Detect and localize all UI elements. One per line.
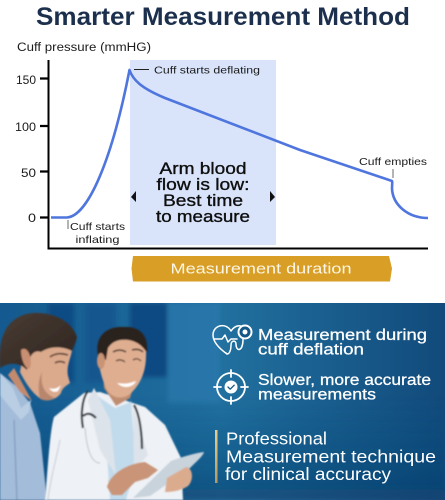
y-axis labels: 0 <box>28 211 36 225</box>
callout: cuff starts inflating: inflating <box>76 234 120 246</box>
y-axis title: Cuff pressure (mmHG) <box>17 42 151 54</box>
measurement duration bar: Measurement duration <box>170 262 352 278</box>
band label <box>156 160 250 226</box>
callout: cuff starts deflating: Cuff starts deflating <box>154 64 260 76</box>
callout: cuff starts inflating <box>68 220 125 246</box>
band label: to measure <box>156 208 250 226</box>
measurement duration bar <box>132 256 392 282</box>
band label: Best time <box>163 192 243 210</box>
icon: target with check <box>214 370 248 404</box>
callout: cuff empties <box>359 156 427 178</box>
low blood flow band <box>130 60 276 245</box>
chart: cuff pressure over time <box>15 42 428 248</box>
gold divider <box>215 430 218 483</box>
y-axis labels: 150 <box>16 73 36 87</box>
photo: doctor <box>45 327 183 500</box>
callout: cuff starts inflating: Cuff starts <box>70 221 125 233</box>
text: professional technique <box>225 428 436 484</box>
text: slower, more accurate measurements <box>258 373 430 400</box>
text: measurement during cuff deflation: cuff deflation <box>258 342 364 358</box>
text: slower, more accurate measurements: measurements <box>258 386 376 404</box>
background windows <box>42 303 442 500</box>
panel background <box>0 303 445 500</box>
panel: doctor and patient photo with benefits <box>0 303 445 500</box>
text: measurement during cuff deflation: Measurement during <box>258 327 427 344</box>
photo: hands and tablet <box>107 452 204 498</box>
text: professional technique: for clinical accuracy <box>225 464 391 484</box>
y-axis labels: 100 <box>15 120 36 134</box>
text: professional technique: Professional <box>226 428 327 448</box>
text: professional technique: Measurement technique <box>226 446 436 466</box>
pressure curve <box>51 70 428 218</box>
y-axis labels: 50 <box>21 166 36 180</box>
title: Smarter Measurement Method <box>36 3 410 31</box>
y-axis labels <box>15 73 36 225</box>
band label: flow is low: <box>156 176 250 194</box>
arrows: band span <box>131 191 275 202</box>
photo: patient <box>0 313 77 500</box>
icon: heart with stethoscope gauge <box>213 326 252 354</box>
text: slower, more accurate measurements: Slower, more accurate <box>258 372 431 389</box>
text: measurement during cuff deflation <box>258 328 426 355</box>
axes <box>40 60 428 248</box>
band label: Arm blood <box>160 160 246 178</box>
callout: cuff empties: Cuff empties <box>359 156 427 168</box>
